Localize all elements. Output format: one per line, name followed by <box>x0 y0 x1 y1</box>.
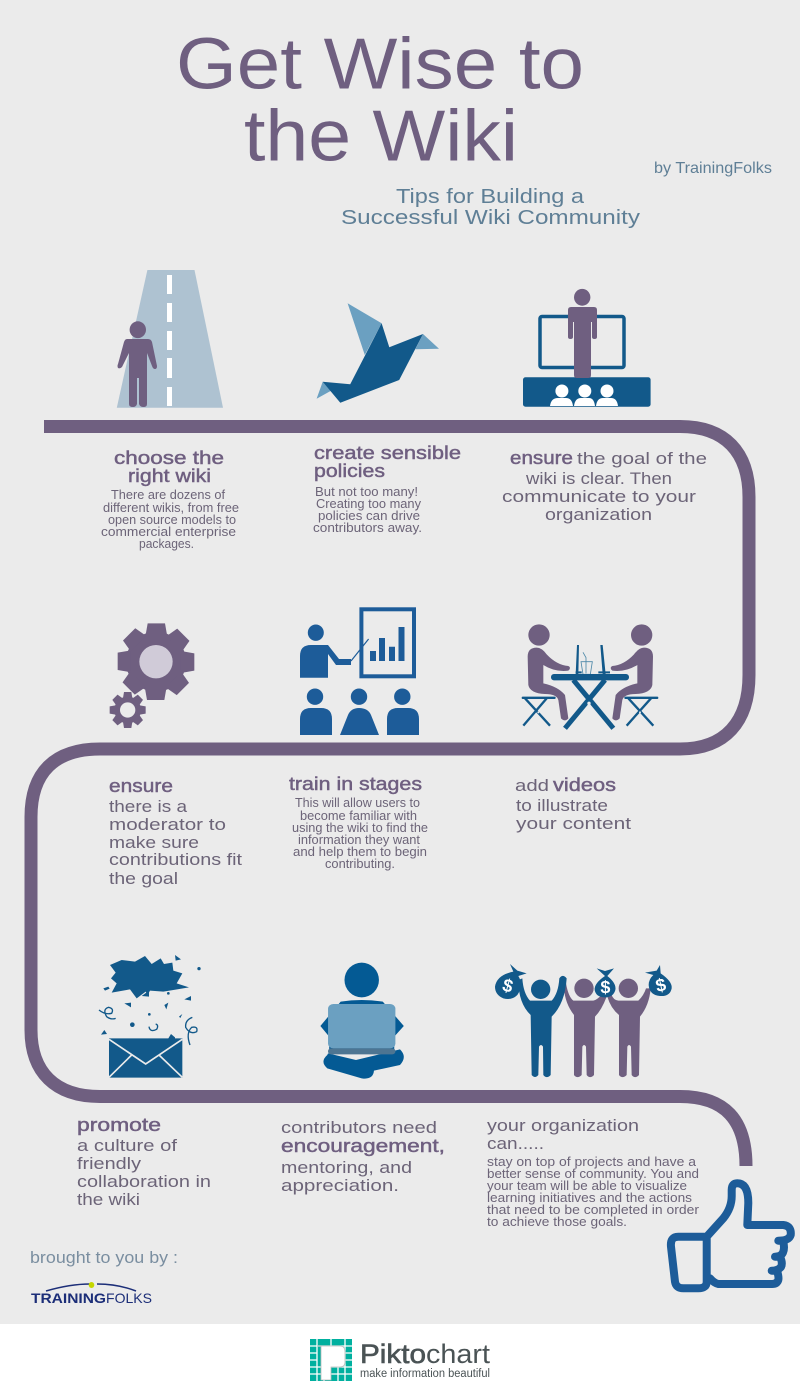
footer logo: Piktochart <box>310 1339 491 1381</box>
logo: TrainingFolks <box>31 1282 152 1306</box>
step: ensure the goal is clear: ensure <box>510 448 573 468</box>
winding path <box>31 426 749 1166</box>
step: ensure there is a moderator: make sure <box>109 833 199 852</box>
footer logo: Piktochart: chart <box>426 1339 491 1369</box>
icon: three people holding money bags: $ <box>500 975 515 997</box>
step: add videos <box>515 775 631 833</box>
step: create sensible policies: Creating too many <box>316 497 422 511</box>
step: your organization can: can..... <box>487 1134 544 1153</box>
subtitle: Successful Wiki Community <box>341 207 640 229</box>
icon: presenter on stage <box>523 289 651 407</box>
step: choose the right wiki: right wiki <box>128 466 211 486</box>
step: contributors need encouragement: encouragement, <box>281 1136 445 1156</box>
step: add videos: videos <box>553 775 616 795</box>
logo: TrainingFolks: TRAINING <box>31 1290 106 1306</box>
step: promote a culture: promote <box>77 1115 161 1135</box>
step: create sensible policies: policies can drive <box>318 509 420 523</box>
step: choose the right wiki <box>101 448 239 551</box>
icon: three people holding money bags <box>495 964 672 1077</box>
step: choose the right wiki: There are dozens of <box>111 488 226 502</box>
icon: seated person with laptop <box>320 963 404 1079</box>
step: ensure the goal is clear <box>502 448 707 524</box>
icon: envelope with confetti <box>99 955 201 1078</box>
step: contributors need encouragement: mentoring, and <box>281 1158 412 1177</box>
step: your organization can: learning initiatives and the actions <box>487 1191 692 1205</box>
subtitle <box>341 186 640 229</box>
step: contributors need encouragement: appreciation. <box>281 1176 399 1195</box>
icon: origami bird <box>317 303 439 403</box>
step: add videos: add <box>515 776 549 795</box>
step: choose the right wiki: open source models to <box>108 513 236 527</box>
step: choose the right wiki: commercial enterprise <box>101 525 236 539</box>
step: add videos: your content <box>516 814 631 833</box>
step: ensure there is a moderator <box>109 776 242 888</box>
step: ensure there is a moderator: the goal <box>109 869 178 888</box>
step: promote a culture <box>77 1115 211 1209</box>
step: promote a culture: friendly <box>77 1154 142 1173</box>
logo: TrainingFolks: FOLKS <box>106 1290 152 1306</box>
icon: thumbs up <box>671 1183 791 1288</box>
icon: three people holding money bags: $ <box>600 977 610 997</box>
byline: by TrainingFolks <box>654 160 772 177</box>
step: choose the right wiki: packages. <box>139 537 194 551</box>
step: train in stages: contributing. <box>325 857 395 871</box>
footer logo: Piktochart: make information beautiful <box>360 1368 490 1380</box>
step: ensure there is a moderator: contributions fit <box>109 850 242 869</box>
title: the Wiki <box>244 96 518 176</box>
icon: gears <box>110 623 194 728</box>
step: promote a culture: collaboration in <box>77 1172 211 1191</box>
step: train in stages: become familiar with <box>300 809 417 823</box>
step: ensure there is a moderator: moderator to <box>109 815 226 834</box>
step: contributors need encouragement <box>281 1118 445 1195</box>
step: ensure the goal is clear: communicate to your <box>502 487 696 506</box>
step: ensure the goal is clear: the goal of the <box>577 449 707 468</box>
step: your organization can: better sense of community. You and <box>487 1167 699 1181</box>
step: ensure the goal is clear: organization <box>545 505 652 524</box>
step: train in stages <box>289 774 428 871</box>
step: train in stages: train in stages <box>289 774 422 794</box>
step: ensure there is a moderator: there is a <box>109 797 188 816</box>
step: your organization can: your team will be able to visualize <box>487 1179 687 1193</box>
step: your organization can: to achieve those goals. <box>487 1215 627 1229</box>
step: your organization can <box>487 1116 699 1229</box>
subtitle: Tips for Building a <box>396 186 585 208</box>
title: Get Wise to <box>176 24 584 104</box>
step: create sensible policies: contributors away. <box>313 521 422 535</box>
step: ensure the goal is clear: wiki is clear. Then <box>525 469 672 488</box>
brought to you by: brought to you by : <box>30 1248 178 1267</box>
step: train in stages: This will allow users to <box>295 796 420 810</box>
step: train in stages: using the wiki to find the <box>292 821 428 835</box>
icon: three people holding money bags: $ <box>654 974 668 996</box>
step: choose the right wiki: choose the <box>114 448 224 468</box>
icon: training presentation <box>300 609 419 735</box>
title <box>176 24 584 176</box>
step: ensure there is a moderator: ensure <box>109 776 173 796</box>
step: contributors need encouragement: contributors need <box>281 1118 437 1137</box>
step: promote a culture: a culture of <box>77 1136 177 1155</box>
icon: two people at table with laptops <box>522 624 658 728</box>
step: create sensible policies <box>313 443 461 535</box>
step: train in stages: information they want <box>298 833 421 847</box>
step: your organization can: stay on top of projects and have a <box>487 1155 696 1169</box>
step: train in stages: and help them to begin <box>293 845 427 859</box>
step: create sensible policies: policies <box>314 461 385 481</box>
step: promote a culture: the wiki <box>77 1190 140 1209</box>
footer logo: Piktochart: Pikto <box>360 1339 426 1369</box>
icon: road with person <box>117 270 223 408</box>
step: choose the right wiki: different wikis, from free <box>103 501 239 515</box>
step: your organization can: that need to be completed in order <box>487 1203 699 1217</box>
step: create sensible policies: create sensible <box>314 443 461 463</box>
step: create sensible policies: But not too many! <box>315 485 418 499</box>
step: add videos: to illustrate <box>516 796 608 815</box>
step: your organization can: your organization <box>487 1116 639 1135</box>
